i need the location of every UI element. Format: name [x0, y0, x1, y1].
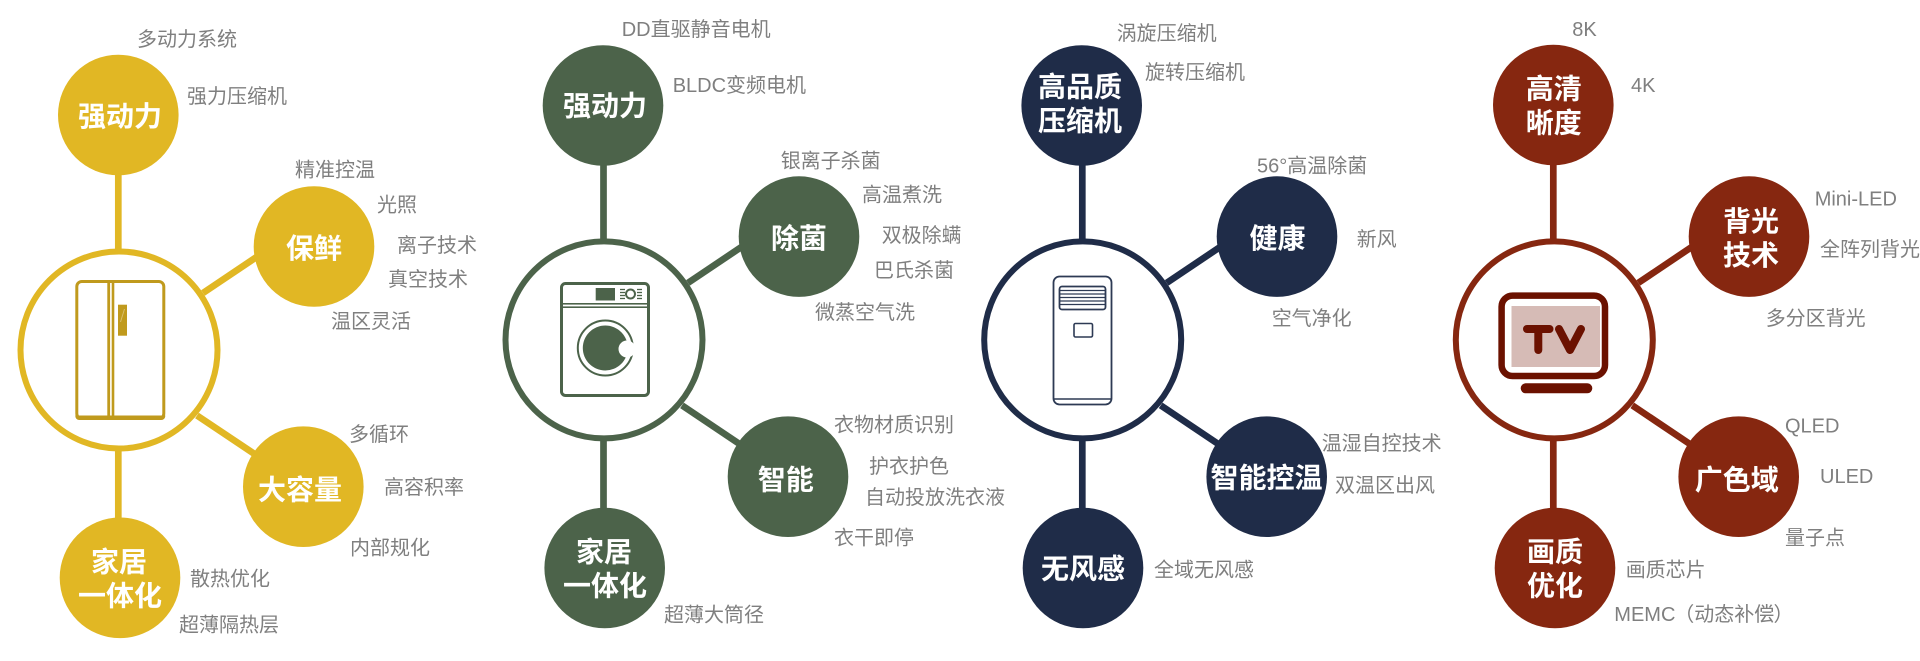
node: 家居一体化 [60, 518, 180, 638]
feature labels: washing machine: 衣干即停 [834, 527, 914, 550]
feature labels: television: 4K [1631, 75, 1656, 97]
feature labels: television: 8K [1572, 19, 1597, 41]
node: 强动力: 强动力 [563, 90, 647, 122]
node: 高品质压缩机 [1021, 45, 1142, 166]
feature labels: refrigerator: 超薄隔热层 [179, 613, 279, 636]
feature labels: refrigerator: 强力压缩机 [187, 85, 287, 108]
node: 家居一体化: 家居 [576, 536, 632, 568]
node: 健康 [1217, 176, 1337, 297]
node: 智能: 智能 [758, 465, 814, 496]
feature labels: washing machine: 银离子杀菌 [781, 150, 881, 172]
panel: television [1456, 19, 1920, 628]
feature labels: television: 画质芯片 [1626, 559, 1706, 582]
feature labels: refrigerator: 精准控温 [295, 158, 375, 182]
feature labels: television: 动态补偿 [1694, 603, 1774, 626]
feature labels: television: 多分区背光 [1766, 307, 1866, 330]
node: 广色域 [1678, 416, 1799, 537]
icon: washing machine [561, 284, 649, 396]
feature labels: washing machine: 高温煮洗 [862, 183, 942, 206]
node: 除菌: 除菌 [771, 223, 827, 254]
panel: washing machine [506, 18, 1005, 628]
feature labels: refrigerator: 离子技术 [397, 234, 477, 257]
node: 家居一体化: 家居 [91, 546, 147, 578]
feature labels: air conditioner: 新风 [1357, 228, 1397, 251]
node: 高清晰度 [1493, 45, 1614, 165]
icon: refrigerator [75, 281, 165, 420]
node: 大容量: 大容量 [258, 475, 342, 506]
connector lines: air conditioner [1082, 106, 1225, 568]
central circle: washing machine [506, 241, 702, 438]
feature labels: air conditioner: 56°高温除菌 [1257, 154, 1367, 178]
node: 画质优化: 优化 [1527, 570, 1583, 602]
feature labels: washing machine [622, 18, 1005, 626]
feature labels: refrigerator: 温区灵活 [331, 310, 411, 333]
node: 智能控温: 智能控温 [1210, 463, 1323, 494]
connector lines: television [1553, 106, 1696, 568]
node: 高清晰度: 晰度 [1526, 108, 1582, 138]
feature labels: television: 全阵列背光 [1820, 238, 1920, 261]
feature labels: television: MEMC [1614, 604, 1675, 626]
feature labels: washing machine: 自动投放洗衣液 [865, 486, 1005, 509]
node: 除菌 [739, 176, 859, 297]
connector lines: washing machine [604, 106, 746, 568]
feature labels: washing machine: 超薄大筒径 [664, 603, 764, 626]
feature labels: television: QLED [1785, 415, 1839, 437]
node: 画质优化: 画质 [1527, 536, 1583, 568]
node: 智能控温 [1206, 416, 1327, 537]
node: 健康: 健康 [1249, 223, 1306, 254]
node: 广色域: 广色域 [1695, 465, 1779, 496]
feature labels: air conditioner: 全域无风感 [1154, 559, 1254, 582]
node: 保鲜 [254, 186, 374, 307]
node: 背光技术: 背光 [1723, 206, 1779, 237]
feature labels: washing machine: 双极除螨 [882, 224, 962, 247]
feature labels: refrigerator: 内部规化 [350, 537, 430, 560]
node: 大容量 [243, 426, 364, 547]
connector lines: refrigerator [118, 115, 261, 578]
node: 画质优化 [1495, 508, 1615, 628]
feature labels: television: （ [1674, 603, 1694, 626]
icon: air conditioner [1054, 276, 1112, 404]
feature labels: washing machine: 巴氏杀菌 [874, 259, 954, 282]
node: 高品质压缩机: 压缩机 [1038, 105, 1122, 136]
feature labels: washing machine: 衣物材质识别 [834, 413, 954, 436]
node: 高清晰度: 高清 [1526, 74, 1582, 104]
node: 家居一体化 [544, 508, 665, 628]
feature labels: refrigerator: 散热优化 [190, 568, 270, 590]
panel: air conditioner [984, 22, 1442, 628]
node: 智能 [728, 416, 848, 537]
node: 背光技术: 技术 [1723, 240, 1779, 271]
feature labels: television [1572, 19, 1920, 626]
feature labels: television: 量子点 [1785, 527, 1845, 550]
feature labels: television: ） [1774, 603, 1794, 626]
node: 背光技术 [1689, 176, 1809, 297]
feature labels: air conditioner: 双温区出风 [1335, 474, 1435, 497]
icon: television [1502, 296, 1605, 393]
feature labels: washing machine: DD直驱静音电机 [622, 18, 771, 41]
central circle: air conditioner [984, 241, 1181, 438]
feature labels: air conditioner: 涡旋压缩机 [1117, 22, 1217, 45]
node: 强动力 [58, 55, 179, 175]
panel: refrigerator [20, 28, 477, 638]
feature labels: washing machine: 护衣护色 [869, 455, 949, 478]
node: 高品质压缩机: 高品质 [1038, 72, 1122, 102]
feature labels: refrigerator [137, 28, 477, 636]
node: 无风感 [1023, 508, 1143, 628]
central circle: television [1456, 241, 1653, 438]
node: 家居一体化: 一体化 [78, 580, 162, 612]
feature labels: television: Mini-LED [1815, 188, 1897, 210]
feature labels: air conditioner: 空气净化 [1272, 307, 1352, 330]
feature labels: refrigerator: 光照 [377, 193, 417, 216]
node: 强动力: 强动力 [78, 101, 162, 132]
feature labels: refrigerator: 多循环 [349, 423, 409, 446]
central circle: refrigerator [20, 252, 218, 448]
node: 家居一体化: 一体化 [563, 570, 647, 602]
node: 无风感: 无风感 [1041, 553, 1125, 584]
node: 保鲜: 保鲜 [286, 233, 342, 264]
feature labels: television: ULED [1820, 466, 1873, 488]
feature labels: refrigerator: 高容积率 [384, 476, 464, 499]
feature labels: air conditioner: 旋转压缩机 [1145, 61, 1245, 84]
feature labels: air conditioner: 温湿自控技术 [1322, 432, 1442, 455]
feature labels: washing machine: BLDC变频电机 [673, 74, 806, 97]
feature labels: air conditioner [1117, 22, 1442, 582]
feature labels: washing machine: 微蒸空气洗 [815, 301, 915, 324]
feature labels: refrigerator: 多动力系统 [137, 28, 237, 51]
feature labels: refrigerator: 真空技术 [388, 268, 468, 291]
node: 强动力 [543, 45, 663, 166]
